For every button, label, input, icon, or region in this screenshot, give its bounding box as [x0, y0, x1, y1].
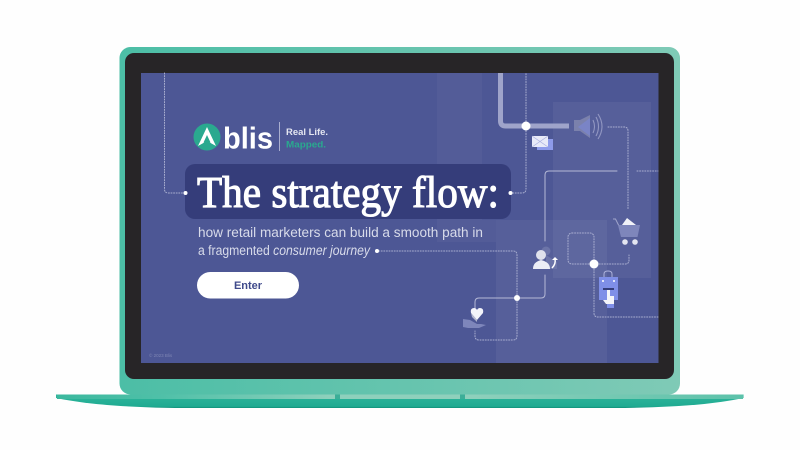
logo: Mapped. — [286, 140, 326, 150]
copyright: © 2023 Blis — [149, 352, 173, 358]
icon: person with arrow — [533, 246, 558, 269]
logo: Real Life. — [286, 127, 328, 138]
subtitle: a fragmented consumer journey — [198, 243, 371, 258]
subtitle — [198, 225, 483, 258]
laptop base — [56, 394, 744, 408]
icon: hand holding heart — [463, 308, 486, 328]
laptop lid — [120, 47, 680, 394]
icon: envelope — [532, 136, 553, 150]
subtitle: how retail marketers can build a smooth path in — [198, 225, 483, 240]
icon: shopping bag with hand — [599, 271, 618, 308]
enter button — [197, 272, 299, 298]
logo — [194, 120, 328, 156]
icon: shopping cart — [613, 218, 640, 245]
logo: blis — [223, 120, 273, 156]
title panel: The strategy flow: — [197, 168, 499, 217]
icon: megaphone speaker — [574, 114, 602, 139]
flow nodes — [184, 122, 598, 301]
flow lines — [164, 73, 658, 340]
enter button: Enter — [234, 280, 263, 292]
screen — [141, 73, 658, 363]
